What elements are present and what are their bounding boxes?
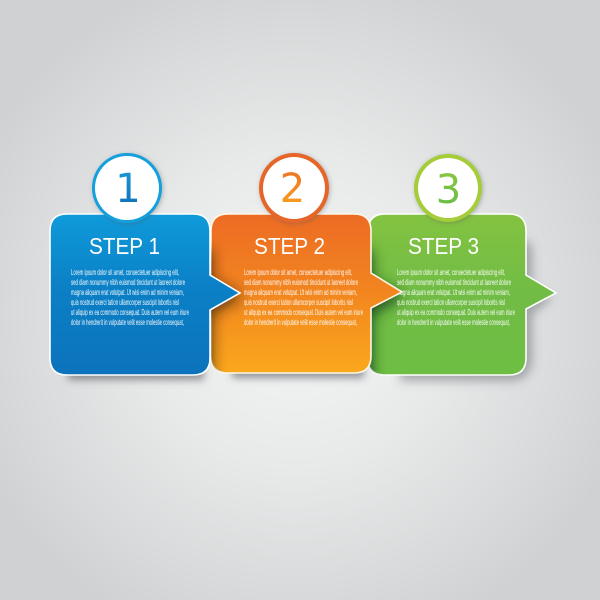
badge 1 ring xyxy=(92,153,162,223)
panel: step 1 xyxy=(50,153,240,380)
heading: step 3: STEP 3 xyxy=(408,233,479,259)
panel 1 shape xyxy=(50,214,240,375)
body text: step 2: sed diam nonummy nibh euismod tincidunt ut laoreet dolore xyxy=(244,277,358,287)
panel: step 3 xyxy=(369,152,558,387)
badge 1 shadow xyxy=(93,154,163,224)
body text: step 1: quis nostrud exerci tation ullamcorper suscipit lobortis nisl xyxy=(71,297,179,307)
badge 2 shadow xyxy=(260,154,330,224)
number 3: 3 xyxy=(436,167,461,213)
body text: step 1: magna aliquam erat volutpat. Ut wisi enim ad minim veniam, xyxy=(71,287,184,297)
body text: step 2: quis nostrud exerci tation ullamcorper suscipit lobortis nisl xyxy=(244,297,353,307)
number 2: 2 xyxy=(280,166,305,212)
shadow from step 2 on panel 3 xyxy=(370,242,408,375)
panel 3 shape xyxy=(368,214,556,375)
panel 2 cast shadow xyxy=(232,358,364,378)
badge 3 shadow xyxy=(415,155,483,223)
body text: step 1: dolor in hendrerit in vulputate velit esse molestie consequat, xyxy=(71,317,184,327)
badge 2 xyxy=(259,153,330,224)
panel: step 1: ut aliquip ex ea commodo consequat. Duis autem vel eum iriure xyxy=(71,307,189,317)
shadow from step 1 on panel 2 xyxy=(211,240,249,372)
badge 1 centre xyxy=(95,156,159,220)
panel: step 2 xyxy=(210,152,404,383)
badge 1 xyxy=(92,153,163,224)
body text: step 1: Lorem ipsum dolor sit amet, consectetuer adipiscing elit, xyxy=(71,267,179,277)
badge 3 ring xyxy=(414,154,482,222)
panel 2 shape xyxy=(211,214,402,373)
body text: step 1: sed diam nonummy nibh euismod tincidunt ut laoreet dolore xyxy=(71,277,185,287)
body text: step 2 xyxy=(244,267,363,327)
heading: step 1: STEP 1 xyxy=(89,233,160,259)
panel 1 cast shadow xyxy=(68,360,204,380)
badge 3 centre xyxy=(418,158,478,218)
badge 2 ring xyxy=(259,153,329,223)
body text: step 1 xyxy=(71,267,189,327)
badge 3 xyxy=(414,154,483,223)
body text: step 3 xyxy=(397,267,515,327)
badge 2 centre xyxy=(263,157,325,219)
panel 3 cast shadow xyxy=(400,240,552,381)
body text: step 2: Lorem ipsum dolor sit amet, consectetuer adipiscing elit, xyxy=(244,267,352,277)
number 1: 1 xyxy=(115,166,141,212)
heading: step 2: STEP 2 xyxy=(254,233,325,259)
panel: step 2: ut aliquip ex ea commodo consequat. Duis autem vel eum iriure xyxy=(244,307,363,317)
body text: step 2: dolor in hendrerit in vulputate velit esse molestie consequat, xyxy=(244,317,357,327)
body text: step 2: magna aliquam erat volutpat. Ut wisi enim ad minim veniam, xyxy=(244,287,357,297)
